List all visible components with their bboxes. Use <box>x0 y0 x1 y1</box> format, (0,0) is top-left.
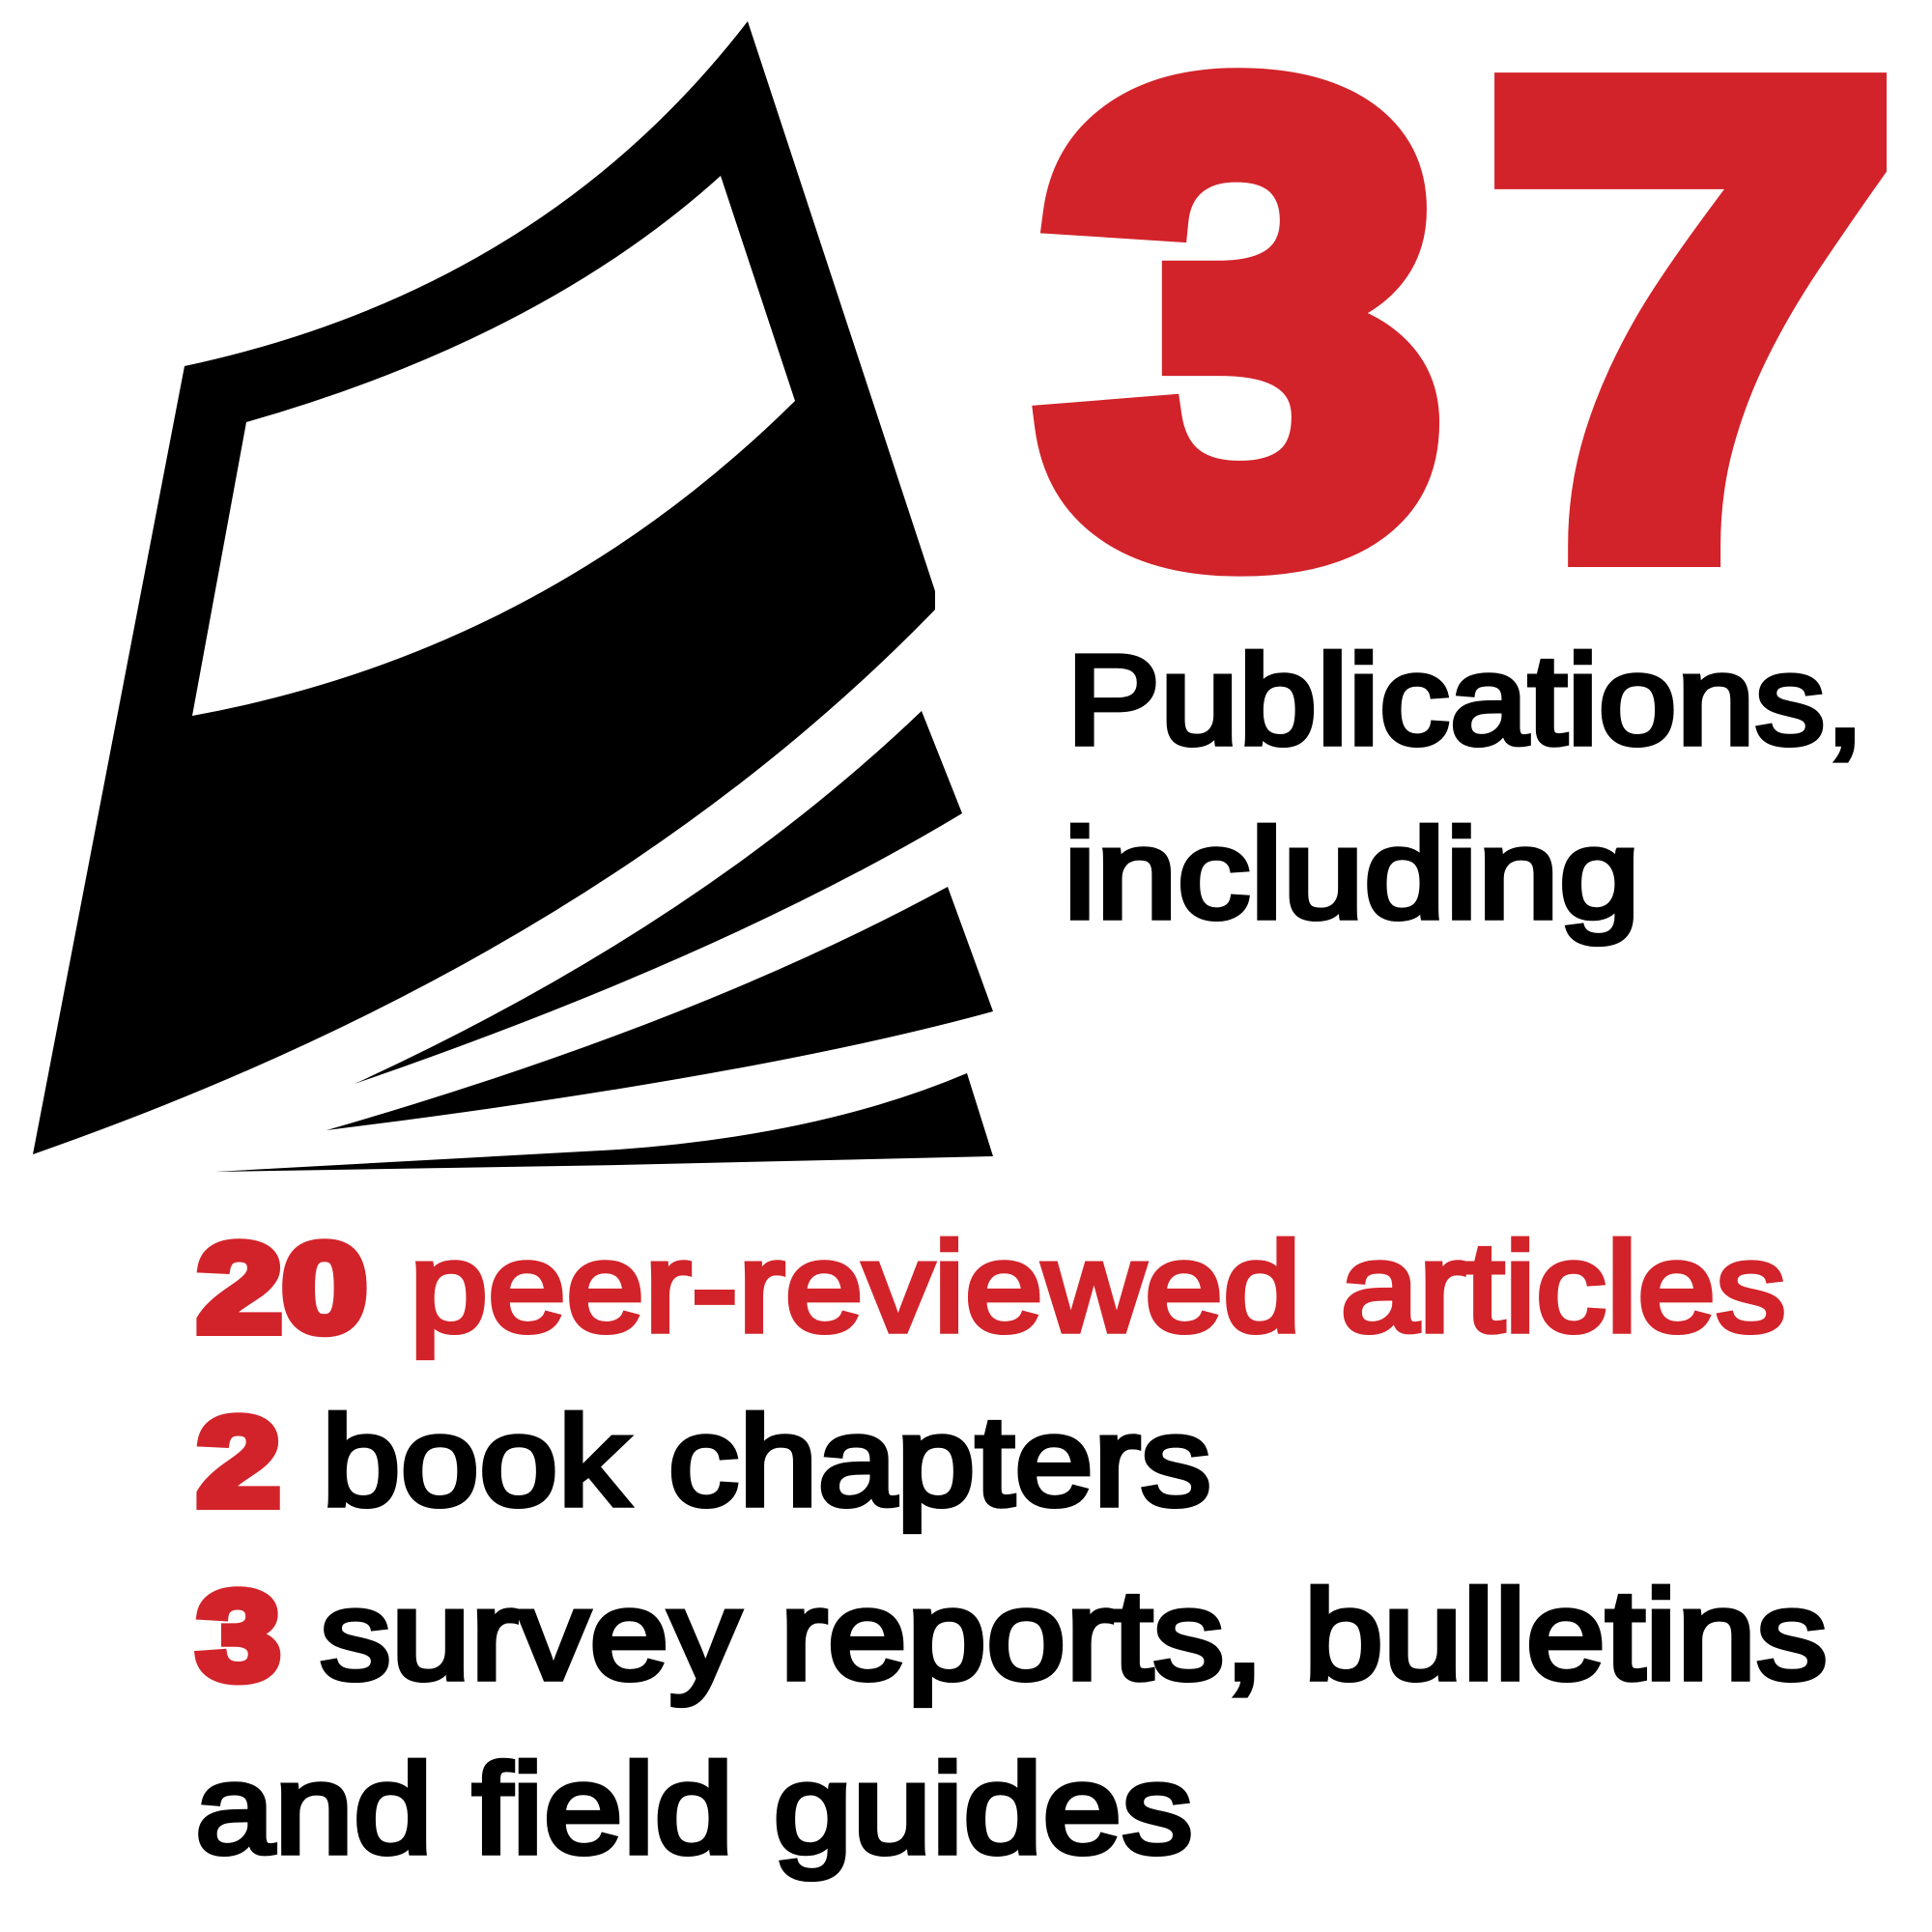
book cover page with window <box>33 21 935 1154</box>
line: including: including <box>1064 803 1640 945</box>
item: 3 survey reports, bulletins: survey reports, bulletins <box>320 1564 1828 1706</box>
item: 20 peer-reviewed articles: peer-reviewed articles <box>410 1216 1786 1358</box>
icon: open book with fanned pages <box>33 21 993 1172</box>
big number 37 <box>1041 0 1895 688</box>
item: 2 book chapters: book chapters <box>322 1390 1211 1532</box>
item: 20 peer-reviewed articles: 20 <box>197 1217 367 1358</box>
item: 2 book chapters: 2 <box>197 1391 280 1532</box>
list: publication breakdown <box>195 1216 1828 1880</box>
page 3 <box>327 887 993 1130</box>
page 4 <box>215 1073 993 1172</box>
line: Publications,: Publications, <box>1066 629 1864 771</box>
item: 3 survey reports, bulletins: 3 <box>197 1565 280 1706</box>
item continuation: and field guides: and field guides <box>195 1738 1193 1880</box>
heading: Publications, including <box>1064 629 1864 945</box>
page 2 <box>355 711 962 1084</box>
